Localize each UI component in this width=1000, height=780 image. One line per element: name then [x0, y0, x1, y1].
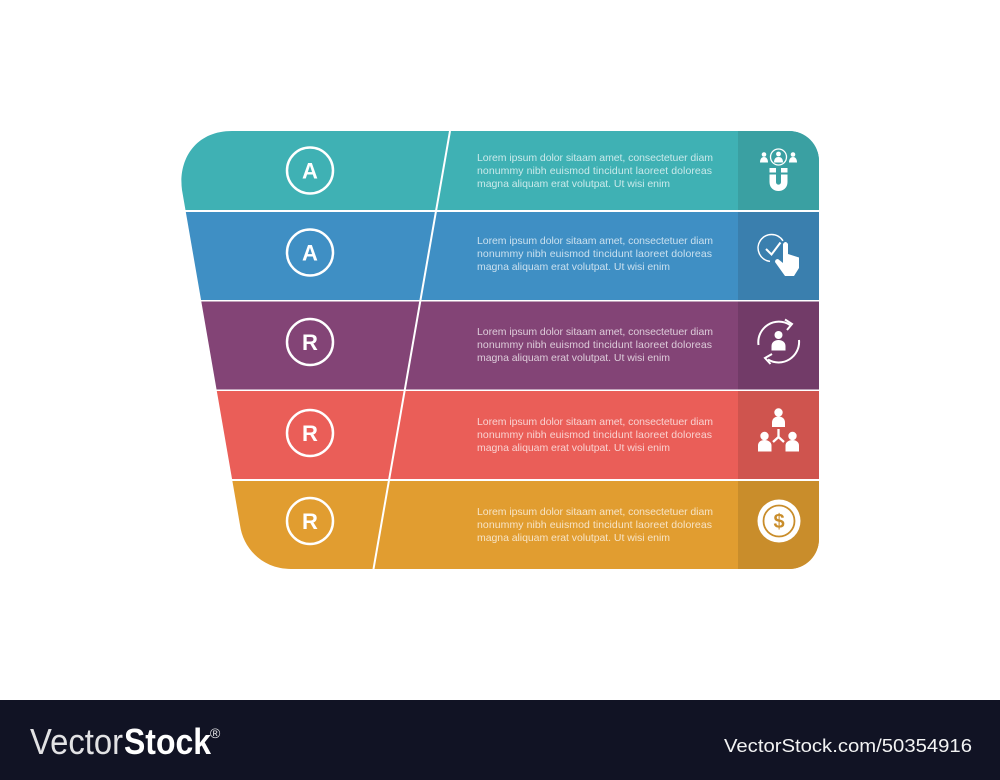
icon: hand tapping check [758, 234, 799, 276]
text block 2: magna aliquam erat volutpat. Ut wisi enim [477, 261, 670, 273]
icon: magnet attracting people [760, 149, 797, 191]
text block 4 [477, 416, 713, 454]
letter badge R [287, 410, 333, 456]
icon: dollar coin: $ [773, 511, 785, 533]
footer bar [0, 700, 1000, 780]
image id: VectorStock.com/50354916 [724, 735, 972, 756]
icon: people network [758, 408, 799, 452]
letter badge A: A [302, 158, 318, 184]
letter badge R [287, 498, 333, 544]
text block 4: magna aliquam erat volutpat. Ut wisi enim [477, 442, 670, 454]
logo [30, 721, 221, 762]
letter badge R: R [302, 509, 318, 534]
letter badge A [287, 230, 333, 276]
icon: person in rotating arrows [758, 320, 799, 364]
text block 1: Lorem ipsum dolor sitaam amet, consectetuer diam [477, 152, 713, 164]
bands [170, 125, 830, 576]
text block 3: magna aliquam erat volutpat. Ut wisi enim [477, 352, 670, 364]
text block 1: magna aliquam erat volutpat. Ut wisi enim [477, 178, 670, 190]
text block 5: Lorem ipsum dolor sitaam amet, consectetuer diam [477, 506, 713, 518]
text block 4: nonummy nibh euismod tincidunt laoreet doloreas [477, 429, 712, 441]
logo: Stock [124, 721, 212, 762]
letter badge R [287, 319, 333, 365]
text block 2: nonummy nibh euismod tincidunt laoreet doloreas [477, 248, 712, 260]
letter badge A: A [302, 240, 318, 266]
text block 5: magna aliquam erat volutpat. Ut wisi enim [477, 532, 670, 544]
text block 1: nonummy nibh euismod tincidunt laoreet doloreas [477, 165, 712, 177]
letter badge R: R [302, 421, 318, 446]
funnel chart [170, 125, 830, 576]
text block 3: nonummy nibh euismod tincidunt laoreet doloreas [477, 339, 712, 351]
letter badge R: R [302, 330, 318, 355]
logo: ® [210, 725, 221, 741]
text block 4: Lorem ipsum dolor sitaam amet, consectetuer diam [477, 416, 713, 428]
text block 3: Lorem ipsum dolor sitaam amet, consectetuer diam [477, 326, 713, 338]
icon: dollar coin [758, 500, 800, 542]
text block 3 [477, 326, 713, 364]
text block 2 [477, 235, 713, 273]
text block 5 [477, 506, 713, 544]
text block 5: nonummy nibh euismod tincidunt laoreet doloreas [477, 519, 712, 531]
diagonal divider [374, 131, 450, 569]
text block 1 [477, 152, 713, 190]
letter badge A [287, 148, 333, 194]
logo: Vector [30, 721, 123, 762]
text block 2: Lorem ipsum dolor sitaam amet, consectetuer diam [477, 235, 713, 247]
